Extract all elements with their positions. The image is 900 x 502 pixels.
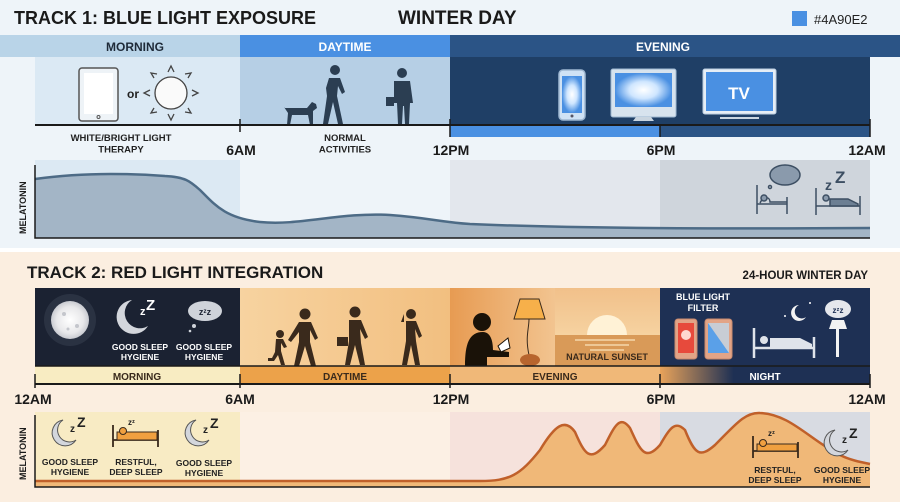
icon: red phone	[675, 319, 697, 359]
legend: colour swatch	[792, 11, 868, 27]
text: normal activities label: NORMAL	[324, 133, 366, 144]
text: blue light filter: FILTER	[688, 303, 719, 313]
time labels: track 1	[226, 142, 886, 158]
chart: track 2 melatonin	[35, 412, 870, 487]
text: good sleep hygiene 5: GOOD SLEEP	[814, 465, 870, 475]
subtitle: 24-hour winter day: 24-HOUR WINTER DAY	[743, 270, 868, 282]
text: good sleep hygiene 4: GOOD SLEEP	[176, 458, 232, 468]
icon: light therapy tablet	[79, 68, 118, 121]
legend: colour swatch: #4A90E2	[814, 12, 868, 27]
time labels: track 1: 6PM	[647, 142, 675, 158]
icon: dog walker	[284, 65, 345, 125]
icon: crescent zzz 2	[185, 415, 219, 446]
text: natural sunset: NATURAL SUNSET	[566, 352, 648, 362]
text: good sleep hygiene 3: HYGIENE	[51, 467, 89, 477]
text: restful deep sleep 1: DEEP SLEEP	[109, 467, 163, 477]
header band: track 1 periods: DAYTIME	[319, 40, 371, 54]
timeline: track 1	[35, 119, 870, 137]
icon: restful bed 2: zᶻ	[768, 429, 775, 438]
icon: person with bag	[386, 68, 413, 124]
icon: crescent with zzz: Z	[146, 297, 155, 314]
icon: walking family	[268, 306, 422, 366]
axis label: melatonin track 2: MELATONIN	[18, 427, 28, 480]
icon: sleeping person zzz	[816, 168, 860, 215]
header band: track 1 periods: EVENING	[636, 40, 690, 54]
icon: thought cloud zzz	[188, 301, 222, 332]
panel: track 2 scenes	[35, 288, 870, 366]
band: track 2 periods	[35, 366, 870, 388]
time labels: track 1: 12PM	[433, 142, 469, 158]
text: restful deep sleep 2: RESTFUL,	[754, 465, 796, 475]
time labels: track 2: 12PM	[433, 391, 469, 407]
time labels: track 2: 6AM	[225, 391, 255, 407]
text: good sleep hygiene 5: HYGIENE	[823, 475, 861, 485]
icon: bed with moon	[754, 302, 814, 358]
title: track 2: TRACK 2: RED LIGHT INTEGRATION	[27, 263, 323, 282]
icon: phone	[559, 70, 585, 120]
text: good sleep hygiene 1: HYGIENE	[121, 352, 159, 362]
text: restful deep sleep 2: DEEP SLEEP	[748, 475, 802, 485]
text: good sleep hygiene 4: HYGIENE	[185, 468, 223, 478]
text: or: or	[127, 87, 139, 101]
text: blue light filter: BLUE LIGHT	[676, 292, 730, 302]
text: restful deep sleep 1: RESTFUL,	[115, 457, 157, 467]
icon: crescent zzz 1: Z	[77, 414, 86, 430]
icon: sleeping person zzz: z	[825, 177, 832, 193]
icon: crescent zzz 2: z	[203, 425, 208, 436]
icon: thought cloud zzz: zᶻz	[199, 307, 212, 317]
title: track 1: TRACK 1: BLUE LIGHT EXPOSURE	[14, 8, 316, 28]
icon: crescent with zzz	[117, 297, 155, 334]
band: track 2 periods: EVENING	[532, 372, 578, 383]
time labels: track 2: 12AM	[14, 391, 52, 407]
text: light therapy label: WHITE/BRIGHT LIGHT	[71, 133, 172, 144]
band: track 2 periods: DAYTIME	[323, 372, 367, 383]
panel: track 2 background	[0, 252, 900, 502]
chart: track 1 melatonin	[35, 160, 870, 238]
icon: computer monitor	[611, 69, 676, 121]
icon: restful bed 2	[753, 429, 798, 458]
header band: track 1 periods	[0, 35, 900, 57]
icon: restful bed 1: zᶻ	[128, 418, 135, 427]
icon: thought lamp: zᶻz	[833, 306, 843, 315]
text: good sleep hygiene 2: GOOD SLEEP	[176, 342, 232, 352]
time labels: track 1: 12AM	[848, 142, 886, 158]
panel: track 1 scenes	[35, 57, 870, 125]
icon: crescent zzz 3: z	[842, 435, 847, 446]
icon: sun	[144, 66, 198, 120]
time labels: track 2: 6PM	[647, 391, 675, 407]
icon: crescent zzz 2: Z	[210, 415, 219, 431]
icon: thought lamp	[825, 300, 851, 357]
icon: dreaming sleeper	[757, 165, 800, 214]
axis label: melatonin track 1: MELATONIN	[18, 181, 28, 234]
icon: crescent with zzz: z	[140, 306, 146, 318]
text: good sleep hygiene 1: GOOD SLEEP	[112, 342, 168, 352]
header band: track 1 periods: MORNING	[106, 40, 164, 54]
icon: crescent zzz 1	[52, 414, 86, 446]
icon: crescent zzz 3	[824, 425, 858, 456]
time labels: track 2: 12AM	[848, 391, 886, 407]
text: light therapy label: THERAPY	[98, 144, 144, 156]
icon: restful bed 1	[113, 418, 158, 447]
time labels: track 1: 6AM	[226, 142, 256, 158]
text: good sleep hygiene 3: GOOD SLEEP	[42, 457, 98, 467]
panel: track 1 background	[0, 0, 900, 248]
icon: tv	[703, 69, 776, 119]
icon: crescent zzz 1: z	[70, 424, 75, 435]
text: good sleep hygiene 2: HYGIENE	[185, 352, 223, 362]
icon: crescent zzz 3: Z	[849, 425, 858, 441]
time labels: track 2	[14, 391, 886, 407]
icon: reader with lamp	[465, 299, 545, 366]
icon: filtered tablet	[705, 319, 732, 359]
icon: sunset	[555, 315, 660, 366]
subtitle: winter day: WINTER DAY	[398, 8, 517, 29]
icon: sleeping person zzz: Z	[835, 168, 845, 187]
icon: full moon	[44, 294, 96, 346]
text: normal activities label: ACTIVITIES	[319, 144, 371, 156]
band: track 2 periods: MORNING	[113, 372, 161, 383]
band: track 2 periods: NIGHT	[749, 372, 781, 383]
icon: tv: TV	[728, 84, 751, 103]
